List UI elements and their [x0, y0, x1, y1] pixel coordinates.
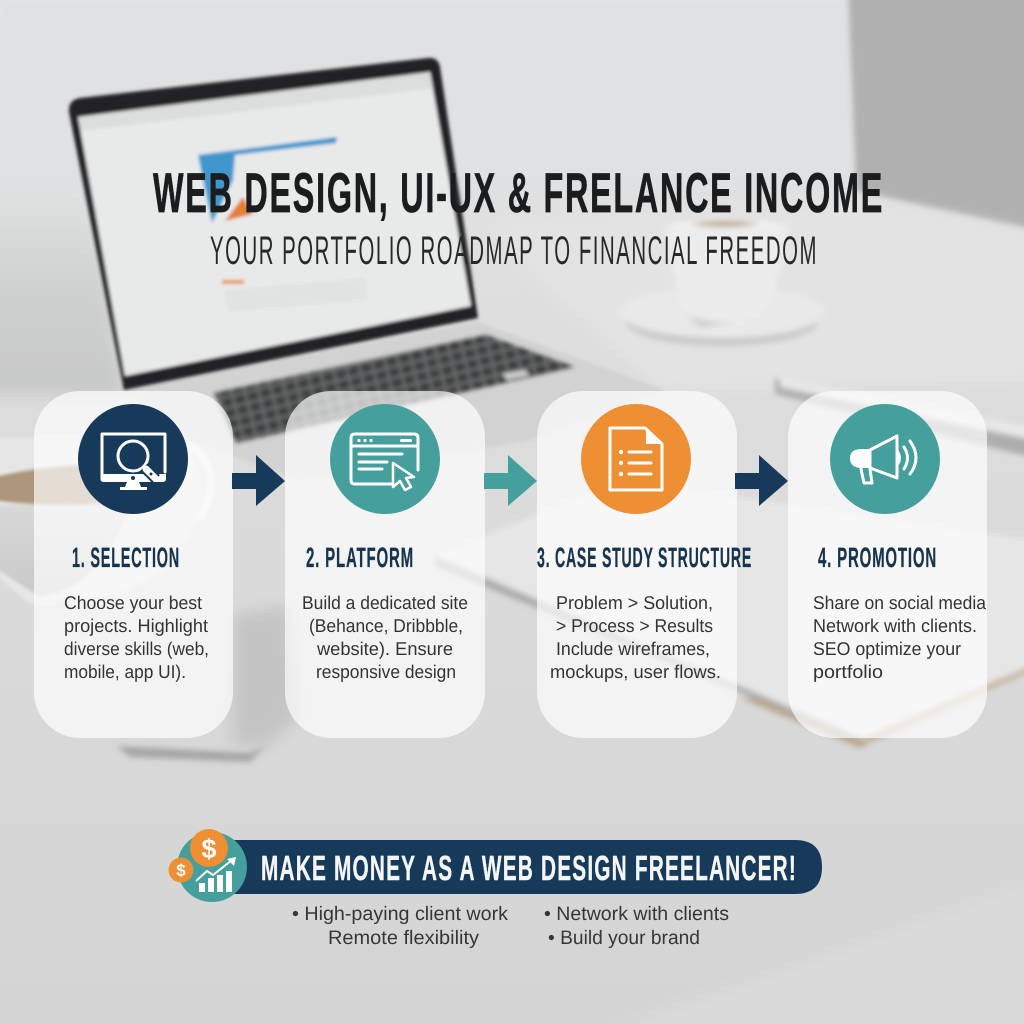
text block: Choose your best [64, 592, 202, 613]
text block: Network with clients. [813, 615, 977, 636]
text block: Problem > Solution, [556, 592, 713, 613]
icon: megaphone [830, 404, 940, 514]
text block: Share on social media [813, 592, 987, 613]
pen and device top right [775, 378, 1024, 458]
bullet list: right: • Network with clients [544, 903, 729, 925]
icon: money and growth chart: $ [201, 834, 217, 864]
text block: SEO optimize your [813, 638, 961, 659]
tablet shadow [117, 746, 265, 762]
panel: 4 promotion [788, 391, 987, 738]
bullet list: right: • Build your brand [548, 927, 700, 949]
text block: mobile, app UI). [64, 661, 186, 682]
saucer and cup top right [626, 298, 818, 346]
bullet list: right [544, 903, 729, 949]
bullet list: left: Remote flexibility [328, 927, 479, 949]
laptop base [125, 322, 665, 480]
text block: mockups, user flows. [550, 661, 721, 682]
icon: document with list [581, 404, 691, 514]
text block: > Process > Results [556, 615, 713, 636]
text block: diverse skills (web, [64, 638, 209, 659]
icon: money and growth chart [168, 829, 247, 902]
cup left [0, 438, 202, 604]
bullet list: left [292, 903, 508, 949]
text block: responsive design [316, 661, 456, 682]
text block: website). Ensure [316, 638, 453, 659]
text block: portfolio [813, 661, 883, 682]
heading: 1. SELECTION [72, 542, 180, 573]
icon: browser window with cursor [330, 404, 440, 514]
icon: monitor with magnifier [78, 404, 188, 514]
panel: 1 selection [34, 391, 233, 738]
arrow 1 [232, 455, 285, 506]
text block [64, 592, 209, 682]
bullet list: left: • High-paying client work [292, 903, 508, 925]
text block [302, 592, 468, 682]
arrow 2 [484, 455, 537, 506]
text block: projects. Highlight [64, 615, 208, 636]
text block: Build a dedicated site [302, 592, 468, 613]
heading: 3. CASE STUDY STRUCTURE [537, 542, 752, 573]
icon: money and growth chart: $ [176, 861, 186, 880]
notebook [435, 480, 1024, 738]
text block [550, 592, 721, 682]
arrow 3 [735, 455, 788, 506]
laptop lid [69, 58, 478, 390]
text block [813, 592, 987, 682]
panel: 2 platform [285, 391, 485, 738]
text block: Include wireframes, [556, 638, 710, 659]
heading: 2. PLATFORM [306, 542, 414, 573]
text block: (Behance, Dribbble, [309, 615, 463, 636]
panel: 3 case study structure [537, 391, 752, 738]
banner: make money call to action [215, 840, 822, 894]
